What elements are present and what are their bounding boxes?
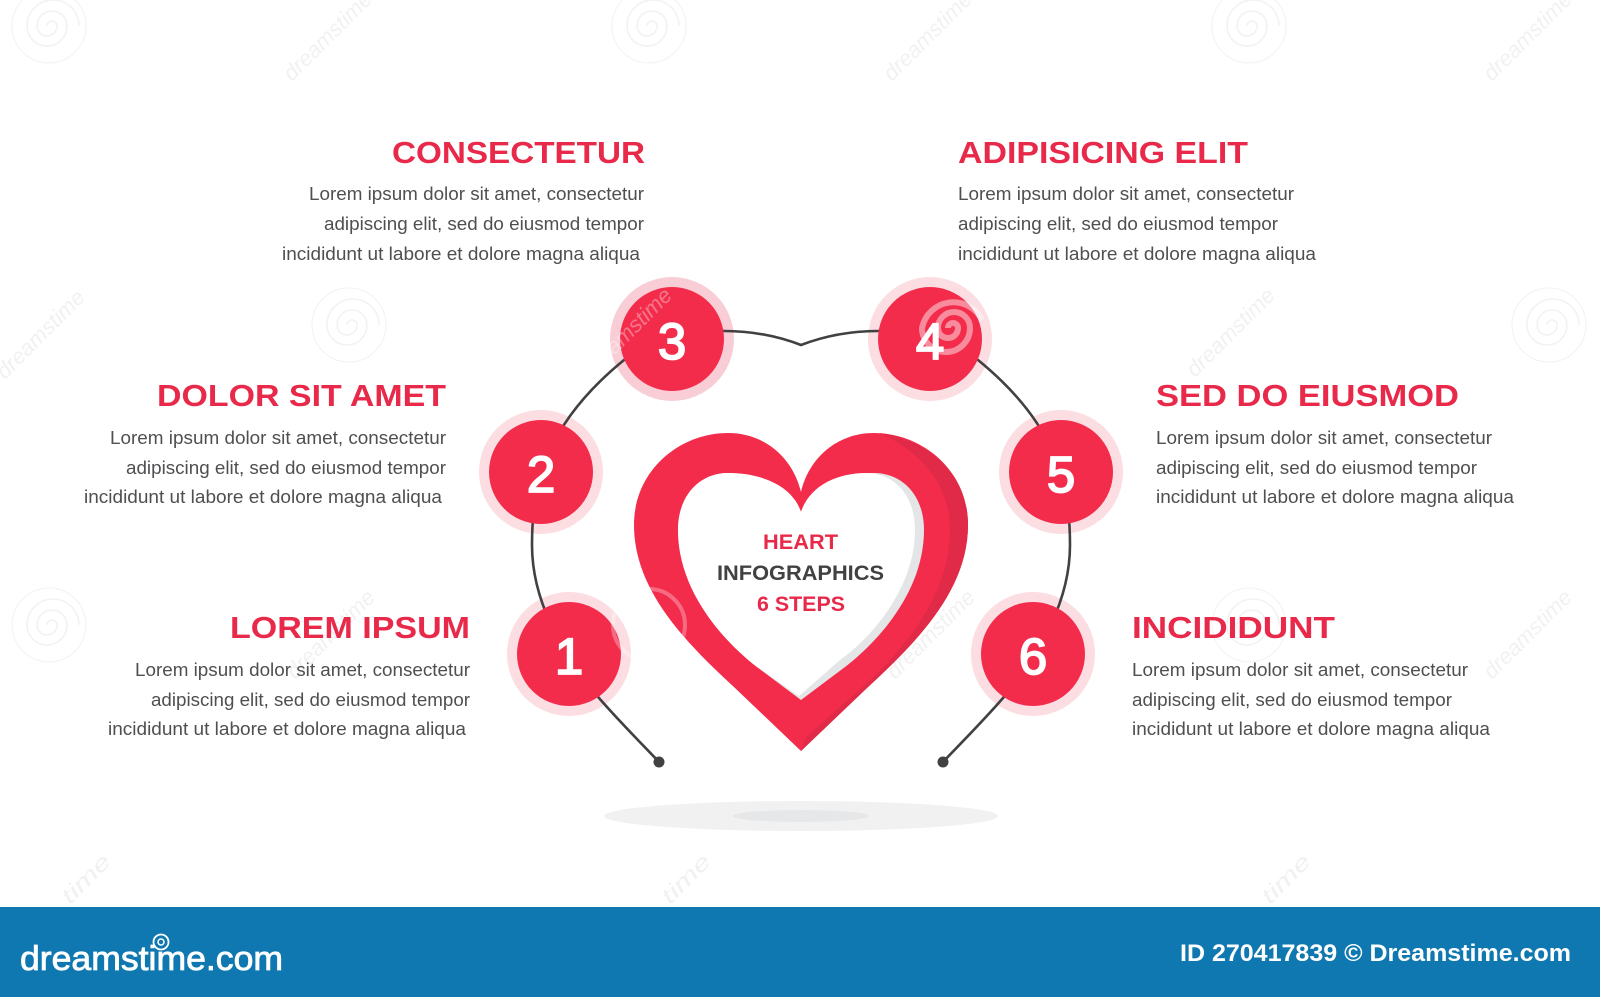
heart center label: 6 STEPS [757,593,845,616]
step 1 circle [517,602,621,706]
text block: sed do eiusmod: SED DO EIUSMOD [1156,378,1459,413]
heart icon [634,433,968,751]
connecting arc line [532,331,1070,768]
heart center label: HEART [763,531,838,554]
step 2 circle [489,420,593,524]
step 5 circle: 5 [1047,446,1075,503]
heart outer shape [634,433,968,751]
text block: dolor sit amet: DOLOR SIT AMET [157,378,446,413]
text block: consectetur: adipiscing elit, sed do eiusmod tempor [324,213,644,234]
text block: dolor sit amet [84,378,446,507]
text block: sed do eiusmod: Lorem ipsum dolor sit amet, consectetur [1156,427,1492,448]
text block: incididunt: incididunt ut labore et dolore magna aliqua [1132,718,1491,739]
step 5 circle [1009,420,1113,524]
watermark pattern: dreamstime [281,585,380,684]
watermark pattern: dreamstime [1181,283,1280,382]
text block: dolor sit amet: adipiscing elit, sed do eiusmod tempor [126,457,446,478]
watermark overlays on artwork: dreamstime [578,283,677,382]
step 3 circle [620,287,724,391]
watermark pattern: time [656,848,716,909]
footer bar [0,907,1600,997]
step 4 circle: 4 [916,313,944,370]
step 3 circle: 3 [658,313,686,370]
text block: sed do eiusmod: incididunt ut labore et dolore magna aliqua [1156,486,1515,507]
text block: sed do eiusmod: adipiscing elit, sed do eiusmod tempor [1156,457,1477,478]
watermark pattern: dreamstime [1478,585,1577,684]
heart center label: INFOGRAPHICS [717,562,884,585]
step 1 circle: 1 [555,628,583,685]
text block: consectetur [282,135,645,264]
footer image id: ID 270417839 © Dreamstime.com [1180,940,1571,967]
text block: consectetur: CONSECTETUR [392,135,645,170]
step 6 circle [981,602,1085,706]
watermark pattern: time [56,848,116,909]
watermark pattern: time [1256,848,1316,909]
step rings [479,277,1123,716]
text block: consectetur: incididunt ut labore et dolore magna aliqua [282,243,641,264]
text block: lorem ipsum: adipiscing elit, sed do eiusmod tempor [151,689,470,710]
text block: lorem ipsum: incididunt ut labore et dolore magna aliqua [108,718,467,739]
text block: dolor sit amet: incididunt ut labore et dolore magna aliqua [84,486,443,507]
watermark overlays on artwork [578,283,982,661]
text block: adipisicing elit: adipiscing elit, sed do eiusmod tempor [958,213,1278,234]
text block: adipisicing elit: Lorem ipsum dolor sit amet, consectetur [958,183,1294,204]
text block: incididunt: Lorem ipsum dolor sit amet, consectetur [1132,659,1468,680]
step 2 circle: 2 [527,446,555,503]
heart center label [717,531,884,616]
text block: adipisicing elit: incididunt ut labore et dolore magna aliqua [958,243,1317,264]
ground shadow [604,801,998,831]
text block: adipisicing elit [958,135,1317,264]
text block: lorem ipsum: LOREM IPSUM [230,610,470,645]
text block: sed do eiusmod [1156,378,1515,507]
heart inner white [678,473,915,696]
step 6 circle: 6 [1019,628,1047,685]
text block: consectetur: Lorem ipsum dolor sit amet, consectetur [309,183,644,204]
heart darker side band [801,433,968,751]
step 4 circle [878,287,982,391]
text block: adipisicing elit: ADIPISICING ELIT [958,135,1248,170]
text block: incididunt: adipiscing elit, sed do eiusmod tempor [1132,689,1452,710]
text block: incididunt: INCIDIDUNT [1132,610,1335,645]
text block: lorem ipsum: Lorem ipsum dolor sit amet, consectetur [135,659,470,680]
text block: incididunt [1132,610,1491,739]
text block: lorem ipsum [108,610,470,739]
footer logo: dreamstime.com [20,940,283,978]
watermark pattern: dreamstime [881,585,980,684]
heart inner shadow [678,473,924,700]
text block: dolor sit amet: Lorem ipsum dolor sit amet, consectetur [110,427,446,448]
